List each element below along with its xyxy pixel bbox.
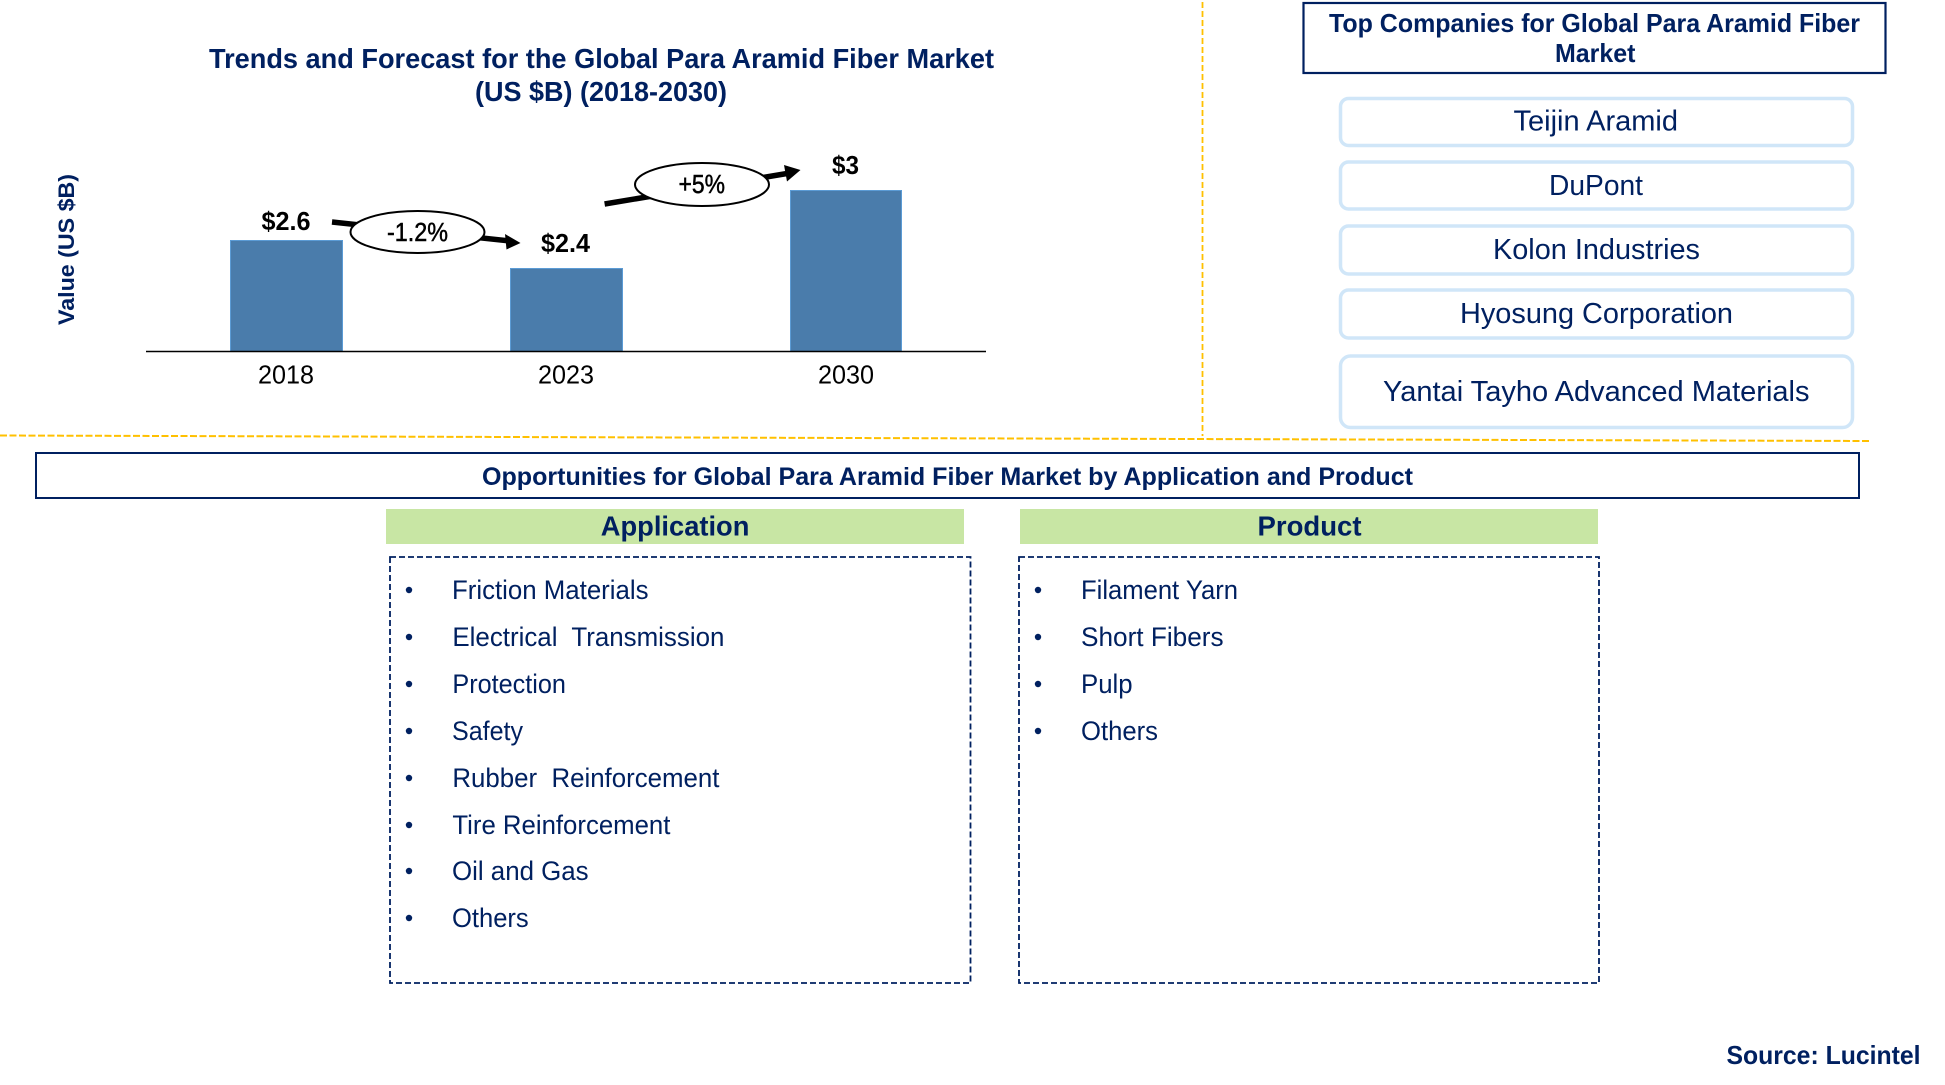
companies heading <box>1304 3 1886 73</box>
year labels: 2030 <box>818 360 874 390</box>
chart title: (US $B) (2018-2030) <box>475 76 727 107</box>
product list: Others <box>1081 716 1158 746</box>
application list: Others <box>452 903 529 933</box>
company: Teijin Aramid <box>1340 98 1852 146</box>
product list: Short Fibers <box>1081 622 1224 652</box>
callout: -1.2%: -1.2% <box>387 217 448 247</box>
company: DuPont <box>1340 162 1852 209</box>
bar: 2018 <box>230 240 342 352</box>
heading: opportunities <box>36 453 1859 498</box>
source note: Source: Lucintel <box>1726 1040 1920 1070</box>
application header <box>386 509 964 544</box>
value labels: $3 <box>832 150 859 180</box>
panel: application <box>386 509 970 983</box>
application list: Friction Materials <box>452 575 648 605</box>
bar: 2023 <box>510 268 622 352</box>
application header: Application <box>601 510 749 542</box>
year labels: 2023 <box>538 360 594 390</box>
company: Yantai Tayho Advanced Materials: Yantai Tayho Advanced Materials <box>1383 376 1810 408</box>
callout: +5% <box>635 163 769 206</box>
panel: top companies <box>1304 3 1886 428</box>
company: Kolon Industries <box>1340 226 1852 274</box>
product header <box>1020 509 1598 544</box>
chart title: Trends and Forecast for the Global Para Aramid Fiber Market <box>209 43 994 74</box>
chart title <box>209 43 994 107</box>
company: Yantai Tayho Advanced Materials <box>1340 356 1852 428</box>
product list: Filament Yarn <box>1081 575 1238 605</box>
y axis label: Value (US $B) <box>54 174 79 325</box>
product list <box>1035 575 1238 746</box>
application list: Electrical Transmission <box>452 622 724 652</box>
application list <box>406 575 724 933</box>
product list: Pulp <box>1081 669 1133 699</box>
year labels: 2018 <box>258 360 314 390</box>
companies heading: Market <box>1555 38 1636 68</box>
callout: -1.2% <box>350 211 484 253</box>
value labels: $2.4 <box>541 228 591 258</box>
application list: Safety <box>452 716 523 746</box>
year labels <box>258 360 874 390</box>
company: Hyosung Corporation: Hyosung Corporation <box>1460 298 1733 330</box>
x axis <box>146 350 986 352</box>
value labels: $2.6 <box>262 206 310 236</box>
value labels <box>262 150 859 258</box>
company: Teijin Aramid: Teijin Aramid <box>1514 106 1678 138</box>
arrow: growth 2023 to 2030 <box>605 165 800 204</box>
companies heading: Top Companies for Global Para Aramid Fiber <box>1329 8 1860 38</box>
heading: opportunities: Opportunities for Global Para Aramid Fiber Market by Application and Product <box>482 463 1414 491</box>
arrow: decline 2018 to 2023 <box>332 222 520 250</box>
company: Hyosung Corporation <box>1340 290 1852 338</box>
application list: Oil and Gas <box>452 856 589 886</box>
panel: product <box>1019 509 1599 983</box>
bar chart <box>146 150 986 390</box>
application list: Rubber Reinforcement <box>452 763 720 793</box>
company: DuPont: DuPont <box>1549 170 1643 202</box>
application list box <box>390 557 970 983</box>
product list box <box>1019 557 1599 983</box>
application list: Tire Reinforcement <box>452 810 671 840</box>
product header: Product <box>1258 510 1362 542</box>
bar: 2030 <box>790 190 902 352</box>
callout: +5%: +5% <box>678 169 725 199</box>
company: Kolon Industries: Kolon Industries <box>1493 234 1700 266</box>
panel: trend chart <box>54 43 994 390</box>
application list: Protection <box>452 669 566 699</box>
